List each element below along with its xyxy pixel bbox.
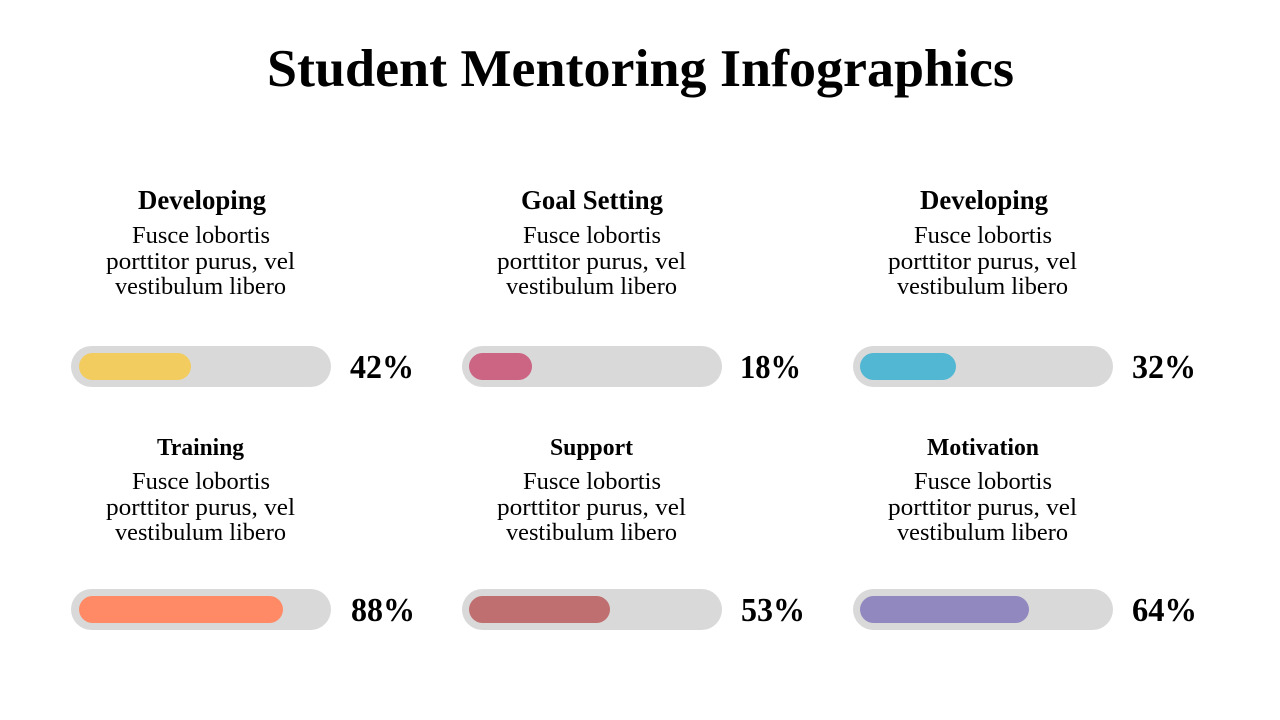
value: 42%: 42% <box>350 349 414 386</box>
text block: developing description: Fusce lobortis <box>132 223 270 249</box>
panel: support 53% <box>462 435 805 630</box>
text block: goal setting description: Fusce lobortis <box>523 223 661 249</box>
progress bar: 42% <box>71 346 331 387</box>
text block: training description: Fusce lobortis <box>132 469 270 495</box>
heading: developing: Developing <box>138 185 266 215</box>
text block: training description: porttitor purus, vel <box>106 495 295 521</box>
panel: goal setting 18% <box>462 185 801 387</box>
text block: developing description: porttitor purus, vel <box>106 249 295 275</box>
text block: support description: Fusce lobortis <box>523 469 661 495</box>
panel: developing 32% <box>853 185 1196 387</box>
progress bar: 18% <box>462 346 722 387</box>
value: 88%: 88% <box>351 592 415 629</box>
value: 32%: 32% <box>1132 349 1196 386</box>
progress bar: 32% <box>853 346 1113 387</box>
text block: developing description: Fusce lobortis <box>914 223 1052 249</box>
text block: motivation description <box>888 469 1077 546</box>
text block: motivation description: vestibulum libero <box>897 520 1068 546</box>
text block: developing description <box>106 223 295 300</box>
text block: goal setting description <box>497 223 686 300</box>
heading: training: Training <box>157 435 244 461</box>
panel: training 88% <box>71 435 415 630</box>
progress bar: 88% <box>71 589 331 630</box>
text block: motivation description: porttitor purus, vel <box>888 495 1077 521</box>
text block: developing description: vestibulum libero <box>897 274 1068 300</box>
heading: developing: Developing <box>920 185 1048 215</box>
value: 64%: 64% <box>1132 592 1197 629</box>
text block: developing description: vestibulum libero <box>115 274 286 300</box>
text block: developing description <box>888 223 1077 300</box>
panel: developing 42% <box>71 185 414 387</box>
progress bar: 53% <box>462 589 722 630</box>
value: 18%: 18% <box>740 349 801 386</box>
text block: support description: vestibulum libero <box>506 520 677 546</box>
value: 53%: 53% <box>741 592 805 629</box>
text block: support description <box>497 469 686 546</box>
text block: goal setting description: porttitor purus, vel <box>497 249 686 275</box>
progress bar: 64% <box>853 589 1113 630</box>
text block: motivation description: Fusce lobortis <box>914 469 1052 495</box>
text block: support description: porttitor purus, vel <box>497 495 686 521</box>
text block: training description: vestibulum libero <box>115 520 286 546</box>
heading: goal setting: Goal Setting <box>521 185 663 215</box>
text block: goal setting description: vestibulum libero <box>506 274 677 300</box>
text block: developing description: porttitor purus, vel <box>888 249 1077 275</box>
heading: support: Support <box>550 435 633 461</box>
title: Student Mentoring Infographics <box>267 40 1014 98</box>
text block: training description <box>106 469 295 546</box>
heading: motivation: Motivation <box>927 435 1039 461</box>
panel: motivation 64% <box>853 435 1197 630</box>
